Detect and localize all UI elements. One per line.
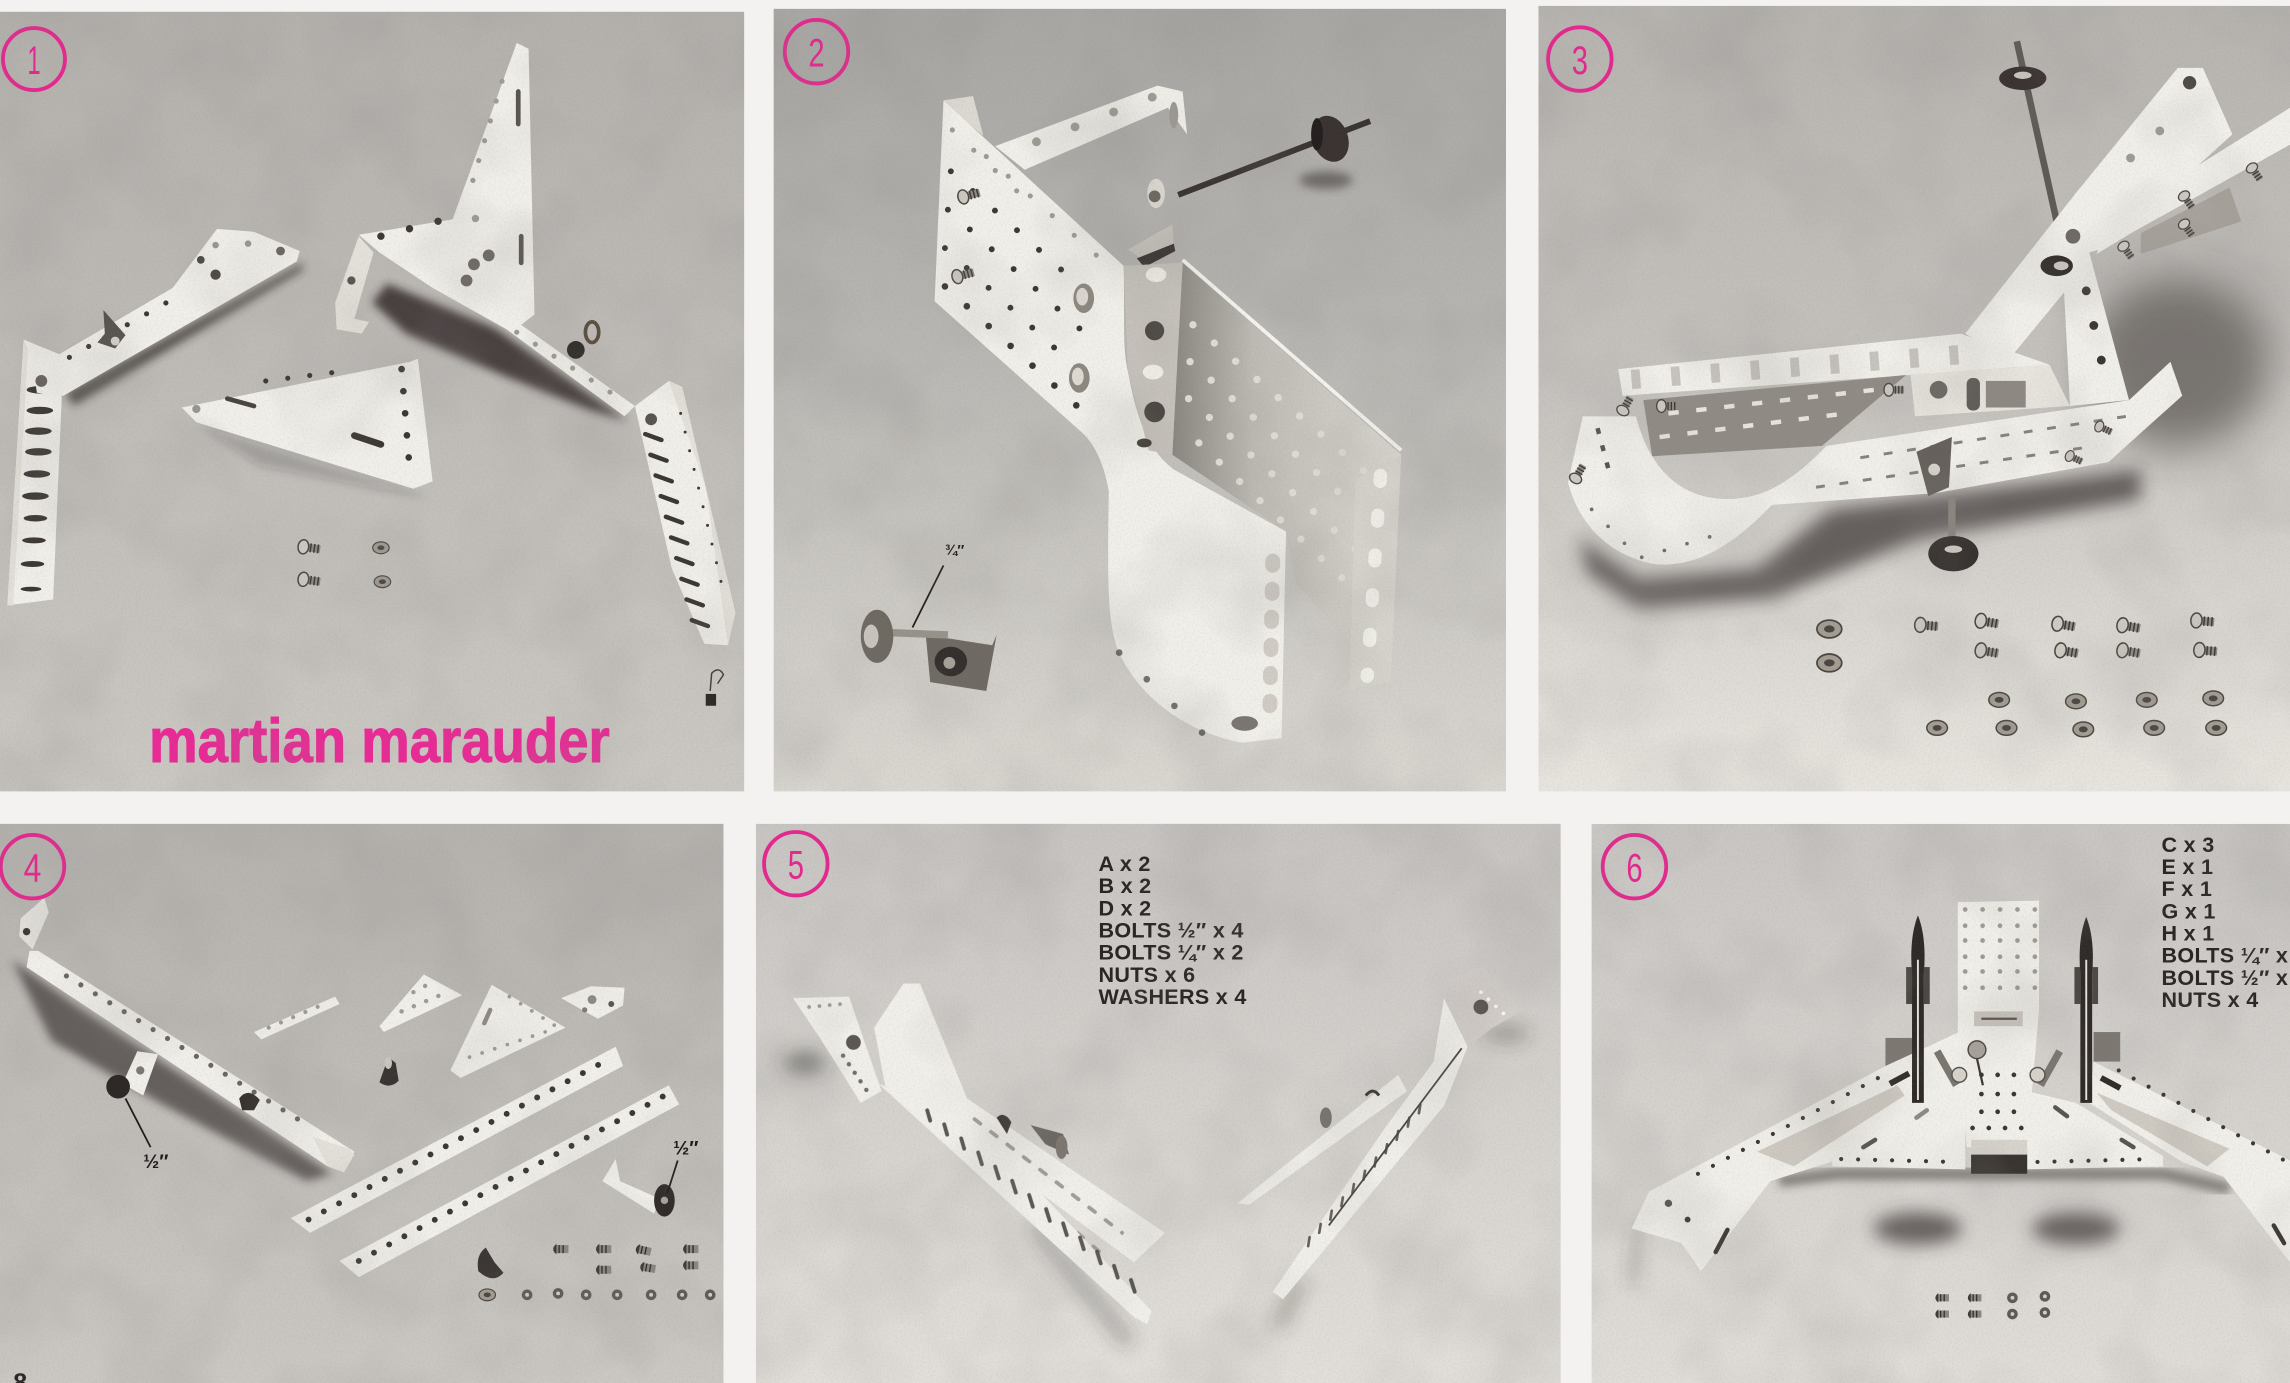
1/2 inch label with leader, left	[125, 1098, 168, 1173]
back plate interior with holes	[1172, 260, 1401, 650]
parts list: A x 2	[1098, 851, 1151, 876]
left arm with bracket	[32, 229, 300, 396]
triangle plate large	[450, 985, 565, 1078]
curved sheet	[1568, 394, 1826, 565]
step number 6: 6	[1626, 846, 1643, 890]
upright rod and wheel	[1999, 41, 2057, 221]
top strip with holes	[995, 86, 1187, 170]
parts list: BOLTS ¼″ x	[2162, 943, 2288, 968]
loose washers	[1817, 620, 1842, 672]
left wing	[1631, 1032, 1965, 1271]
1/2 inch label with leader, right	[667, 1139, 698, 1193]
right slotted strip	[635, 381, 735, 645]
parts list: D x 2	[1098, 895, 1151, 920]
wheel shadow	[1299, 171, 1352, 189]
long perforated beam	[19, 898, 354, 1172]
step number 3: 3	[1572, 39, 1588, 83]
3/4 inch label with leader	[912, 543, 964, 627]
loose bolts	[1914, 612, 2218, 661]
panel 1: first assembly step	[0, 12, 744, 791]
bracket with wheel	[602, 1159, 675, 1217]
right corner plate	[1447, 966, 1524, 1047]
1/2 inch label with leader, left: ½″	[143, 1152, 168, 1173]
step number 4	[1, 835, 64, 898]
step number 5	[764, 832, 828, 895]
parts list: BOLTS ½″ x	[2162, 965, 2288, 990]
parts list: BOLTS ¼″ x 2	[1098, 940, 1244, 965]
3/4 inch label with leader: ¾″	[945, 543, 964, 559]
centre mechanism	[1937, 1041, 2060, 1085]
panel 4: fourth assembly step	[0, 824, 723, 1383]
central perforated plate	[1958, 901, 2039, 1174]
back plate end flange with slots	[1349, 455, 1401, 690]
soft cast shadows	[1580, 276, 2269, 608]
long strip lower	[340, 1085, 679, 1277]
panel 2: second assembly step	[774, 9, 1506, 791]
shadows below right assembly	[65, 263, 627, 499]
parts list: WASHERS x 4	[1098, 984, 1247, 1009]
right faint strip	[1237, 1075, 1407, 1205]
step number 2: 2	[808, 31, 825, 75]
small pin mark	[706, 670, 723, 706]
floor shadows	[1633, 1212, 2120, 1285]
beam shadow	[12, 960, 332, 1181]
loose bolts	[553, 1243, 698, 1275]
step number 5: 5	[788, 843, 804, 887]
left flange with bolts	[1124, 263, 1183, 455]
panel 6: finished model	[1592, 824, 2290, 1383]
front perforated plate	[1657, 362, 2182, 505]
front plate and curved sheet	[935, 100, 1286, 743]
step number 4: 4	[24, 846, 41, 890]
right long strip	[1273, 998, 1468, 1299]
small angle bracket	[379, 1057, 399, 1086]
right rocket	[2074, 917, 2098, 1103]
panel 5: fifth assembly step	[756, 824, 1561, 1383]
parts list: E x 1	[2162, 854, 2213, 879]
step number 1: 1	[27, 39, 41, 83]
right triangle plate	[2027, 1091, 2163, 1169]
step number 3	[1548, 27, 1612, 91]
small strip	[254, 997, 340, 1039]
dark perforated plate	[1643, 375, 1906, 456]
main arm	[1965, 68, 2232, 406]
parts list: G x 1	[2162, 898, 2216, 923]
triangle plate small	[379, 974, 462, 1032]
parts list: H x 1	[2162, 921, 2215, 946]
right tall triangle assembly	[335, 43, 635, 416]
left rocket	[1906, 915, 1930, 1103]
rear flange of front plate	[943, 96, 983, 136]
parts list: F x 1	[2162, 876, 2212, 901]
short stub with pinion	[106, 1051, 158, 1098]
inner box	[1911, 365, 2070, 416]
right wing	[2089, 1062, 2290, 1262]
left square plate	[793, 997, 881, 1103]
dark rear brackets	[1885, 1032, 2120, 1069]
parts list: C x 3	[2162, 832, 2215, 857]
parts list: NUTS x 6	[1098, 962, 1195, 987]
long strip upper	[291, 1047, 623, 1233]
loose wheel and bracket	[861, 610, 997, 691]
left long slotted strip	[878, 1084, 1152, 1324]
axle bracket and lower wheel	[1916, 437, 1978, 571]
left upright wing	[874, 983, 1165, 1262]
step number 2	[785, 20, 848, 83]
threaded rod and wheel	[1128, 111, 1370, 267]
small plate with cut-outs	[561, 986, 625, 1019]
parts list: BOLTS ½″ x 4	[1098, 918, 1244, 943]
side strip with bolts	[2097, 108, 2290, 261]
loose bolts and nuts	[297, 539, 391, 589]
left triangle plate	[1832, 1091, 1965, 1169]
title: martian marauder: martian marauder	[149, 707, 610, 776]
small bracket by bolts	[478, 1248, 503, 1278]
bolts on front plate	[950, 186, 1094, 393]
loose bolts and nuts	[1935, 1291, 2050, 1319]
loose nuts	[1927, 691, 2227, 737]
left bracket	[1031, 1125, 1069, 1159]
centre triangle plate	[182, 359, 433, 489]
back slotted strip	[1618, 334, 2049, 396]
1/2 inch label with leader, right: ½″	[673, 1139, 698, 1160]
step number 6	[1603, 835, 1666, 898]
parts list: B x 2	[1098, 873, 1151, 898]
left angle strip with slots	[7, 340, 63, 605]
step number 1	[3, 28, 65, 90]
under-wing shadows	[1779, 1174, 2229, 1189]
loose nuts	[479, 1288, 715, 1301]
panel 3: third assembly step	[1538, 6, 2290, 791]
soft shadows	[784, 1023, 1530, 1344]
parts list: NUTS x 4	[2162, 987, 2259, 1012]
